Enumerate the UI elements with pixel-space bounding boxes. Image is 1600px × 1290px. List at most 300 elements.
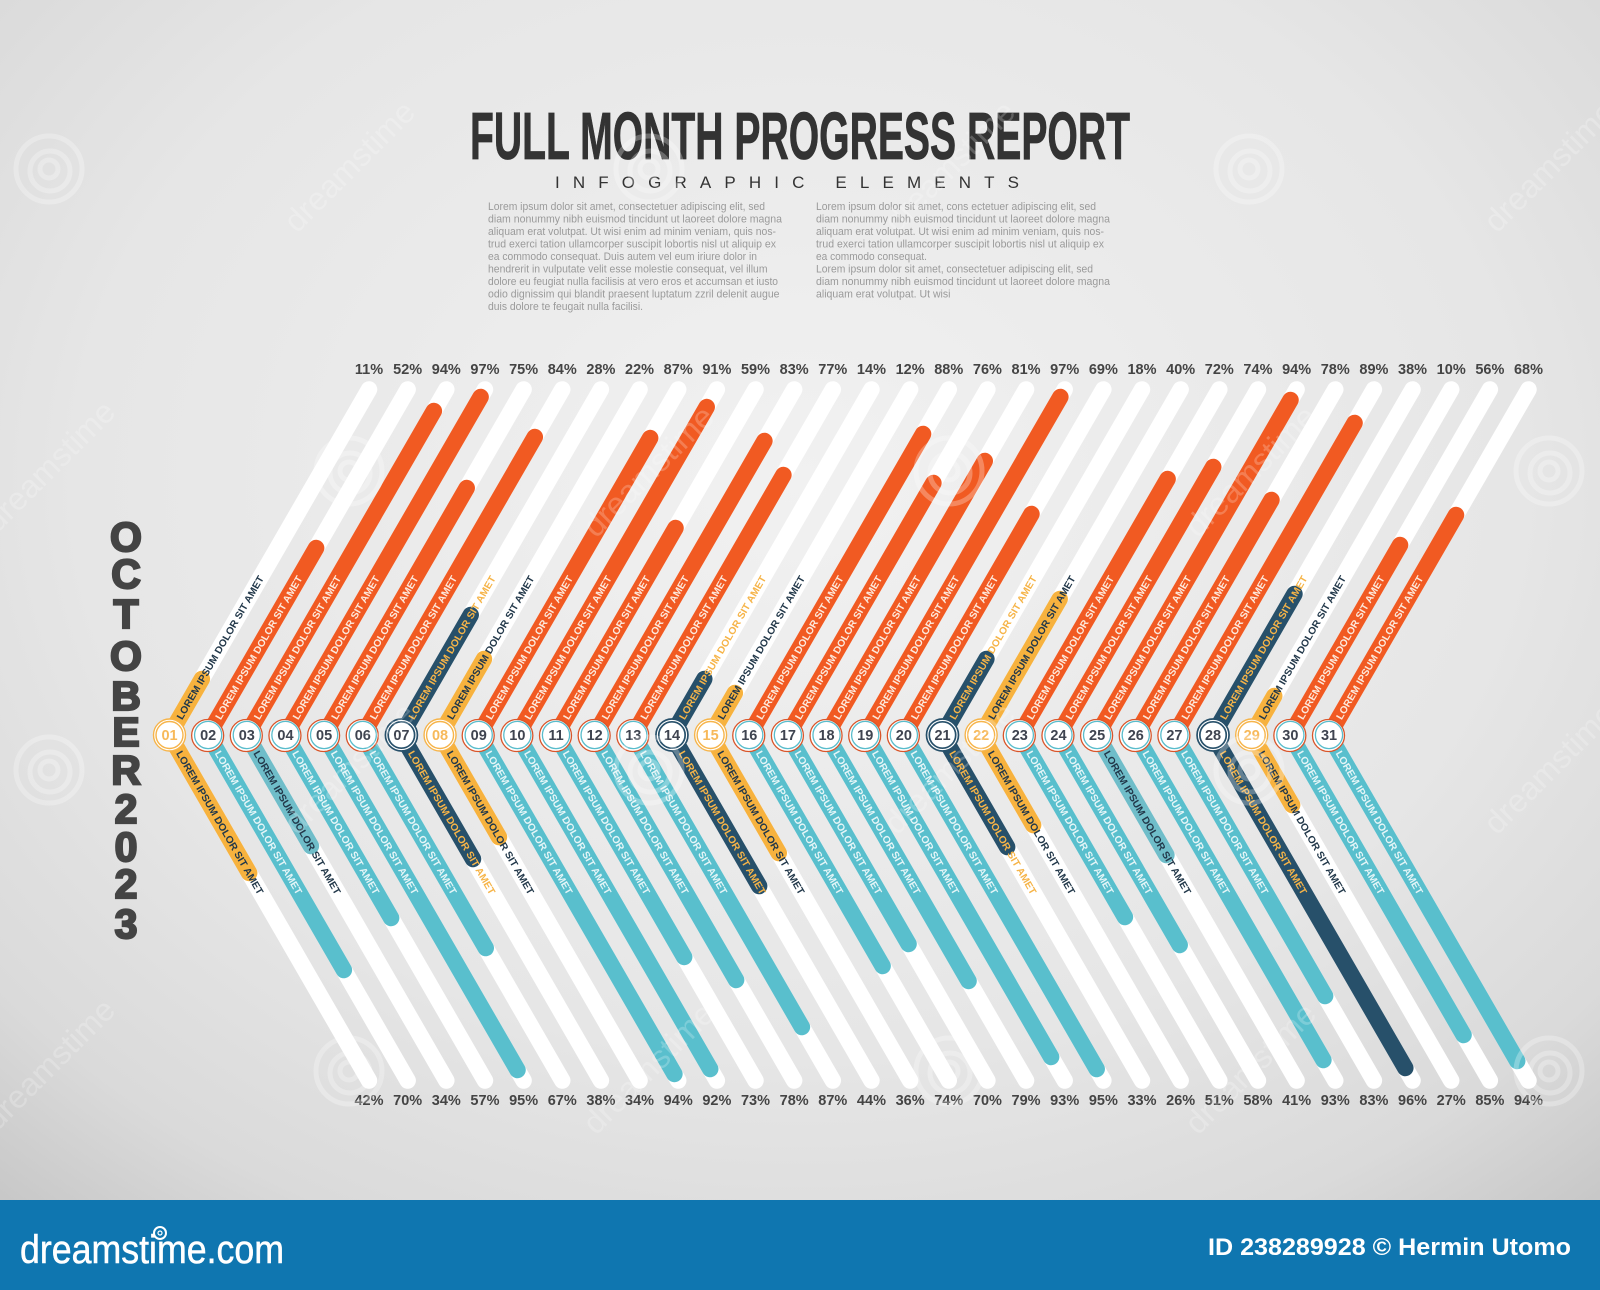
upper bar 12 <box>591 387 800 738</box>
marker 13 <box>617 720 649 752</box>
day 23 <box>1003 362 1234 1109</box>
marker 02: 02 <box>200 728 216 744</box>
day 26 <box>1119 362 1350 1109</box>
top value 09: 87% <box>664 362 693 378</box>
bottom value 25: 41% <box>1282 1093 1311 1109</box>
upper bar 21: LOREM IPSUM DOLOR SIT AMET <box>948 574 1040 722</box>
watermark: diagonal wordmarks: dreamstime <box>575 398 721 544</box>
day 22 <box>965 362 1195 1109</box>
lower bar 13 <box>628 733 837 1084</box>
upper bar 22 <box>977 387 1186 738</box>
lower bar 10: LOREM IPSUM DOLOR SIT AMET <box>521 749 613 897</box>
top value 12: 83% <box>780 362 809 378</box>
lower bar 15 <box>705 733 914 1084</box>
watermark: diagonal wordmarks: dreamstime <box>276 93 422 239</box>
lower bar 10 <box>512 733 721 1084</box>
top value 03: 94% <box>432 362 461 378</box>
upper bar 07: LOREM IPSUM DOLOR SIT AMET <box>407 574 499 722</box>
title: FULL MONTH PROGRESS REPORT <box>470 99 1130 174</box>
lower bar 25 <box>1091 733 1300 1084</box>
lower bar 27: LOREM IPSUM DOLOR SIT AMET <box>1178 749 1270 897</box>
day 10 <box>501 362 731 1109</box>
lower bar 04 <box>280 733 489 1084</box>
text block: right column: ea commodo consequat. <box>816 251 927 263</box>
upper bar 21 <box>939 387 1148 738</box>
marker 29 <box>1236 719 1268 751</box>
marker 03: 03 <box>239 728 255 744</box>
bottom value 24: 58% <box>1243 1093 1273 1109</box>
bottom value 31: 94% <box>1514 1093 1543 1109</box>
upper bar 13: LOREM IPSUM DOLOR SIT AMET <box>639 574 731 722</box>
upper bar 17: LOREM IPSUM DOLOR SIT AMET <box>794 574 885 722</box>
upper bar 04: LOREM IPSUM DOLOR SIT AMET <box>291 574 383 722</box>
marker 12 <box>578 720 610 752</box>
lower bar 03: LOREM IPSUM DOLOR SIT AMET <box>251 749 342 897</box>
vertical heading: October 2023: C <box>111 551 141 597</box>
lower bar 20: LOREM IPSUM DOLOR SIT AMET <box>908 749 999 897</box>
marker 04: 04 <box>277 728 294 744</box>
bottom value 15: 36% <box>896 1093 925 1109</box>
upper bar 15 <box>707 387 916 738</box>
day 21 <box>926 362 1157 1109</box>
bottom value 04: 57% <box>470 1093 500 1109</box>
upper bar 06 <box>359 387 568 738</box>
upper bar 17 <box>784 387 993 738</box>
vertical heading: October 2023: E <box>112 709 140 755</box>
top value 05: 75% <box>509 362 538 378</box>
lower bar 22 <box>975 733 1184 1084</box>
upper bar 23 <box>1016 387 1225 738</box>
watermark: diagonal wordmarks: dreamstime <box>876 93 1022 239</box>
marker 12: 12 <box>587 728 603 744</box>
day 17 <box>771 362 1002 1109</box>
lower bar 30: LOREM IPSUM DOLOR SIT AMET <box>1294 749 1386 897</box>
day 13 <box>617 362 847 1109</box>
day 30 <box>1274 362 1504 1109</box>
lower bar 15: LOREM IPSUM DOLOR SIT AMET <box>714 749 806 897</box>
day 20 <box>887 362 1118 1109</box>
top value 28: 38% <box>1398 362 1427 378</box>
marker 29: 29 <box>1244 728 1260 744</box>
top value 25: 94% <box>1282 362 1311 378</box>
lower bar 09 <box>473 733 682 1084</box>
marker 21 <box>926 719 958 751</box>
watermark: diagonal wordmarks: dreamstime <box>1177 398 1323 544</box>
day 16 <box>733 362 963 1109</box>
lower bar 02: LOREM IPSUM DOLOR SIT AMET <box>212 749 303 897</box>
upper bar 24: LOREM IPSUM DOLOR SIT AMET <box>1064 574 1156 722</box>
marker 06: 06 <box>355 728 371 744</box>
upper bar 19 <box>861 387 1070 738</box>
marker 26: 26 <box>1128 728 1144 744</box>
text block: right column: aliquam erat volutpat. Ut wisi enim ad minim veniam, quis nos- <box>816 226 1104 238</box>
vertical heading: October 2023: 3 <box>115 901 137 947</box>
lower bar 29: LOREM IPSUM DOLOR SIT AMET <box>1255 749 1347 897</box>
marker 20: 20 <box>896 728 912 744</box>
vertical heading: October 2023: 2 <box>115 786 137 832</box>
lower bar 23: LOREM IPSUM DOLOR SIT AMET <box>1024 749 1115 897</box>
upper bar 10: LOREM IPSUM DOLOR SIT AMET <box>523 574 615 722</box>
upper bar 12: LOREM IPSUM DOLOR SIT AMET <box>600 574 692 722</box>
upper bar 15: LOREM IPSUM DOLOR SIT AMET <box>716 574 808 722</box>
day 09 <box>462 362 693 1109</box>
text block: right column: Lorem ipsum dolor sit amet, consectetuer adipiscing elit, sed <box>816 264 1093 276</box>
text block: right column: aliquam erat volutpat. Ut wisi <box>816 288 950 300</box>
day 24 <box>1042 362 1273 1109</box>
marker 14: 14 <box>664 728 680 744</box>
day 29 <box>1236 362 1466 1109</box>
upper bar 30: LOREM IPSUM DOLOR SIT AMET <box>1296 574 1388 722</box>
footer credit: ID 238289928 © Hermin Utomo <box>1208 1234 1571 1261</box>
top value 06: 84% <box>548 362 577 378</box>
lower bar 06 <box>357 733 566 1084</box>
lower bar 29 <box>1246 733 1455 1084</box>
bottom value 26: 93% <box>1321 1093 1350 1109</box>
day 14 <box>656 362 886 1109</box>
marker 01 <box>154 719 186 751</box>
top value 01: 11% <box>355 362 383 378</box>
upper bar 07 <box>398 387 607 738</box>
bottom value 18: 79% <box>1012 1093 1041 1109</box>
lower bar 17 <box>782 733 991 1084</box>
top value 08: 22% <box>625 362 654 378</box>
upper bar 16: LOREM IPSUM DOLOR SIT AMET <box>755 574 846 722</box>
lower bar 31: LOREM IPSUM DOLOR SIT AMET <box>1333 749 1424 897</box>
marker 10: 10 <box>509 728 525 744</box>
marker 27 <box>1158 720 1190 752</box>
marker 05 <box>308 720 340 752</box>
upper bar 31 <box>1325 387 1534 738</box>
upper bar 29 <box>1248 387 1457 738</box>
bottom value 22: 26% <box>1166 1093 1195 1109</box>
lower bar 02 <box>202 733 411 1084</box>
marker 17 <box>771 720 803 752</box>
upper bar 19: LOREM IPSUM DOLOR SIT AMET <box>871 574 962 722</box>
marker 10 <box>501 720 533 752</box>
day 07 <box>385 362 616 1109</box>
day 15 <box>695 362 925 1109</box>
lower bar 18 <box>821 733 1030 1084</box>
day 11 <box>540 362 770 1109</box>
marker 13: 13 <box>625 728 641 744</box>
marker 31: 31 <box>1321 728 1337 744</box>
day 19 <box>849 362 1079 1109</box>
lower bar 08 <box>434 733 643 1084</box>
bottom value 01: 42% <box>354 1093 384 1109</box>
top value 13: 77% <box>818 362 847 378</box>
marker 27: 27 <box>1166 728 1182 744</box>
lower bar 16 <box>744 733 953 1084</box>
top value 20: 69% <box>1089 362 1118 378</box>
upper bar 11 <box>552 387 761 738</box>
vertical heading: October 2023: O <box>110 514 142 560</box>
day 05 <box>308 362 538 1109</box>
upper bar 10 <box>514 387 723 738</box>
upper bar 14: LOREM IPSUM DOLOR SIT AMET <box>678 574 769 722</box>
lower bar 24: LOREM IPSUM DOLOR SIT AMET <box>1062 749 1154 897</box>
upper bar 02: LOREM IPSUM DOLOR SIT AMET <box>214 574 305 722</box>
upper bar 27: LOREM IPSUM DOLOR SIT AMET <box>1180 574 1272 722</box>
upper bar 06: LOREM IPSUM DOLOR SIT AMET <box>368 574 460 722</box>
top value 19: 97% <box>1050 362 1079 378</box>
upper bar 05: LOREM IPSUM DOLOR SIT AMET <box>330 574 421 722</box>
upper bar 03 <box>243 387 452 738</box>
marker 08 <box>424 719 456 751</box>
upper bar 01 <box>166 387 375 738</box>
top value 30: 56% <box>1475 362 1504 378</box>
text block: right column: trud exerci tation ullamcorper suscipit lobortis nisl ut aliquip ex <box>816 238 1104 250</box>
lower bar 21 <box>937 733 1146 1084</box>
bottom value 27: 83% <box>1359 1093 1389 1109</box>
bottom value 05: 95% <box>509 1093 538 1109</box>
lower bar 19: LOREM IPSUM DOLOR SIT AMET <box>869 749 961 897</box>
vertical heading: October 2023: R <box>111 747 141 793</box>
upper bar 24 <box>1055 387 1264 738</box>
lower bar 31 <box>1323 733 1532 1084</box>
lower bar 21: LOREM IPSUM DOLOR SIT AMET <box>946 749 1038 897</box>
footer logo: dreamstime.com <box>20 1228 284 1272</box>
text block: left column <box>488 201 783 313</box>
marker 21: 21 <box>934 728 951 744</box>
lower bar 04: LOREM IPSUM DOLOR SIT AMET <box>289 749 381 897</box>
top value 18: 81% <box>1012 362 1041 378</box>
text block: left column: ea commodo consequat. Duis autem vel eum iriure dolor in <box>488 251 757 263</box>
lower bar 14: LOREM IPSUM DOLOR SIT AMET <box>676 749 767 897</box>
marker 07 <box>385 719 417 751</box>
bottom value 10: 92% <box>702 1093 731 1109</box>
bottom value 17: 70% <box>973 1093 1002 1109</box>
bottom value 28: 96% <box>1398 1093 1427 1109</box>
marker 09 <box>462 720 494 752</box>
upper bar 20 <box>900 387 1109 738</box>
upper bar 01: LOREM IPSUM DOLOR SIT AMET <box>175 574 267 722</box>
chart: daily progress chevrons <box>154 362 1543 1109</box>
marker 16 <box>733 720 765 752</box>
upper bar 18 <box>823 387 1032 738</box>
text block: right column: diam nonummy nibh euismod tincidunt ut laoreet dolore magna <box>816 276 1111 288</box>
day 27 <box>1158 362 1389 1109</box>
day 12 <box>578 362 809 1109</box>
lower bar 07: LOREM IPSUM DOLOR SIT AMET <box>405 749 497 897</box>
upper bar 22: LOREM IPSUM DOLOR SIT AMET <box>987 574 1078 722</box>
text block: left column: duis dolore te feugait nulla facilisi. <box>488 301 643 313</box>
day 31 <box>1312 362 1543 1109</box>
upper bar 11: LOREM IPSUM DOLOR SIT AMET <box>562 574 653 722</box>
marker 30 <box>1274 720 1306 752</box>
upper bar 23: LOREM IPSUM DOLOR SIT AMET <box>1025 574 1117 722</box>
marker 11 <box>540 720 572 752</box>
lower bar 28 <box>1207 733 1416 1084</box>
upper bar 14 <box>668 387 877 738</box>
lower bar 05 <box>318 733 527 1084</box>
bottom value 07: 38% <box>586 1093 616 1109</box>
upper bar 27 <box>1171 387 1380 738</box>
text block: left column: hendrerit in vulputate velit esse molestie consequat, vel illum <box>488 264 768 276</box>
marker 22 <box>965 719 997 751</box>
day 03 <box>230 362 461 1109</box>
upper bar 08: LOREM IPSUM DOLOR SIT AMET <box>446 574 537 722</box>
marker 31 <box>1312 720 1344 752</box>
upper bar 05 <box>320 387 529 738</box>
upper bar 03: LOREM IPSUM DOLOR SIT AMET <box>252 574 344 722</box>
day 18 <box>810 362 1041 1109</box>
vertical heading: October 2023: 0 <box>115 824 137 870</box>
marker 06 <box>346 720 378 752</box>
upper bar 26 <box>1132 387 1341 738</box>
vertical heading: October 2023: B <box>111 673 141 719</box>
day 01 <box>154 362 384 1109</box>
bottom value 11: 73% <box>741 1093 770 1109</box>
marker 23: 23 <box>1012 728 1028 744</box>
top value 16: 88% <box>934 362 963 378</box>
vertical heading: October 2023: T <box>113 591 139 637</box>
lower bar 11: LOREM IPSUM DOLOR SIT AMET <box>560 749 651 897</box>
text block: right column <box>816 201 1111 300</box>
lower bar 08: LOREM IPSUM DOLOR SIT AMET <box>444 749 535 897</box>
lower bar 30 <box>1285 733 1494 1084</box>
upper bar 13 <box>629 387 839 738</box>
upper bar 04 <box>282 387 491 738</box>
lower bar 27 <box>1169 733 1378 1084</box>
bottom value 21: 33% <box>1127 1093 1157 1109</box>
marker 16: 16 <box>741 728 757 744</box>
lower bar 17: LOREM IPSUM DOLOR SIT AMET <box>792 749 883 897</box>
text block: right column: diam nonummy nibh euismod tincidunt ut laoreet dolore magna <box>816 214 1111 226</box>
text block: right column: Lorem ipsum dolor sit amet, cons ectetuer adipiscing elit, sed <box>816 201 1096 213</box>
lower bar 20 <box>898 733 1107 1084</box>
text block: left column: diam nonummy nibh euismod tincidunt ut laoreet dolore magna <box>488 214 783 226</box>
top value 14: 14% <box>857 362 886 378</box>
marker 17: 17 <box>780 728 796 744</box>
watermark: diagonal wordmarks: dreamstime <box>276 695 422 841</box>
marker 25: 25 <box>1089 728 1105 744</box>
top value 29: 10% <box>1437 362 1466 378</box>
day 28 <box>1197 362 1427 1109</box>
text block: left column: Lorem ipsum dolor sit amet, consectetuer adipiscing elit, sed <box>488 201 765 213</box>
marker 03 <box>230 720 262 752</box>
upper bar 31: LOREM IPSUM DOLOR SIT AMET <box>1335 574 1426 722</box>
bottom value 16: 74% <box>934 1093 963 1109</box>
bottom value 08: 34% <box>625 1093 654 1109</box>
upper bar 09: LOREM IPSUM DOLOR SIT AMET <box>484 574 576 722</box>
marker 22: 22 <box>973 728 989 744</box>
marker 15: 15 <box>703 728 719 744</box>
lower bar 28: LOREM IPSUM DOLOR SIT AMET <box>1217 749 1308 897</box>
lower bar 11 <box>550 733 759 1084</box>
marker 24 <box>1042 720 1074 752</box>
lower bar 24 <box>1053 733 1262 1084</box>
upper bar 28 <box>1209 387 1418 738</box>
top value 11: 59% <box>741 362 770 378</box>
top value 27: 89% <box>1359 362 1389 378</box>
upper bar 25: LOREM IPSUM DOLOR SIT AMET <box>1103 574 1194 722</box>
marker 15 <box>695 719 727 751</box>
day 08 <box>424 362 654 1109</box>
top value 04: 97% <box>470 362 500 378</box>
marker 25 <box>1081 720 1113 752</box>
top value 10: 91% <box>702 362 731 378</box>
bottom value 13: 87% <box>818 1093 847 1109</box>
day 06 <box>346 362 577 1109</box>
lower bar 18: LOREM IPSUM DOLOR SIT AMET <box>830 749 922 897</box>
top value 07: 28% <box>586 362 616 378</box>
lower bar 13: LOREM IPSUM DOLOR SIT AMET <box>637 749 729 897</box>
lower bar 19 <box>859 733 1069 1084</box>
watermark: diagonal wordmarks: dreamstime <box>575 995 721 1141</box>
watermark: spiral marks <box>16 136 1582 1104</box>
top value 31: 68% <box>1514 362 1543 378</box>
marker 19: 19 <box>857 728 873 744</box>
lower bar 16: LOREM IPSUM DOLOR SIT AMET <box>753 749 845 897</box>
lower bar 06: LOREM IPSUM DOLOR SIT AMET <box>367 749 458 897</box>
upper bar 29: LOREM IPSUM DOLOR SIT AMET <box>1257 574 1349 722</box>
vertical heading: October 2023: 2 <box>115 861 137 907</box>
marker 26 <box>1119 720 1151 752</box>
marker 08: 08 <box>432 728 448 744</box>
text block: left column: odio dignissim qui blandit praesent luptatum zzril delenit augue <box>488 288 780 300</box>
upper bar 09 <box>475 387 684 738</box>
bottom value 19: 93% <box>1050 1093 1079 1109</box>
lower bar 22: LOREM IPSUM DOLOR SIT AMET <box>985 749 1076 897</box>
day 25 <box>1081 362 1311 1109</box>
upper bar 16 <box>745 387 954 738</box>
marker 18: 18 <box>818 728 835 744</box>
top value 02: 52% <box>393 362 422 378</box>
lower bar 12: LOREM IPSUM DOLOR SIT AMET <box>598 749 690 897</box>
bottom value 06: 67% <box>548 1093 577 1109</box>
lower bar 05: LOREM IPSUM DOLOR SIT AMET <box>328 749 419 897</box>
marker 14 <box>656 719 688 751</box>
watermark: diagonal wordmarks: dreamstime <box>876 695 1022 841</box>
upper bar 02 <box>204 387 413 738</box>
upper bar 25 <box>1093 387 1302 738</box>
marker 30: 30 <box>1282 728 1298 744</box>
lower bar 12 <box>589 733 798 1084</box>
upper bar 08 <box>436 387 645 738</box>
bottom value 14: 44% <box>857 1093 886 1109</box>
top value 17: 76% <box>973 362 1002 378</box>
day 02 <box>192 362 422 1109</box>
lower bar 03 <box>241 733 450 1084</box>
marker 28: 28 <box>1205 728 1221 744</box>
top value 26: 78% <box>1321 362 1350 378</box>
bottom value 03: 34% <box>432 1093 461 1109</box>
marker 24: 24 <box>1050 728 1067 744</box>
lower bar 26: LOREM IPSUM DOLOR SIT AMET <box>1140 749 1231 897</box>
marker 18 <box>810 720 842 752</box>
marker 09: 09 <box>471 728 487 744</box>
marker 11: 11 <box>548 728 564 744</box>
bottom value 02: 70% <box>393 1093 422 1109</box>
marker 04 <box>269 720 301 752</box>
upper bar 28: LOREM IPSUM DOLOR SIT AMET <box>1219 574 1310 722</box>
lower bar 25: LOREM IPSUM DOLOR SIT AMET <box>1101 749 1192 897</box>
vertical heading: October 2023 <box>110 514 142 947</box>
marker 19 <box>849 720 881 752</box>
watermark: diagonal wordmarks: dreamstime <box>1177 995 1323 1141</box>
marker 05: 05 <box>316 728 332 744</box>
upper bar 26: LOREM IPSUM DOLOR SIT AMET <box>1141 574 1233 722</box>
top value 24: 74% <box>1243 362 1273 378</box>
bottom value 20: 95% <box>1089 1093 1118 1109</box>
lower bar 07 <box>396 733 605 1084</box>
lower bar 01 <box>164 733 373 1084</box>
text block: left column: dolore eu feugiat nulla facilisis at vero eros et accumsan et iusto <box>488 276 778 288</box>
bottom value 09: 94% <box>664 1093 693 1109</box>
text block: left column: trud exerci tation ullamcorper suscipit lobortis nisl ut aliquip ex <box>488 238 776 250</box>
footer band <box>0 1200 1600 1290</box>
top value 23: 72% <box>1205 362 1234 378</box>
